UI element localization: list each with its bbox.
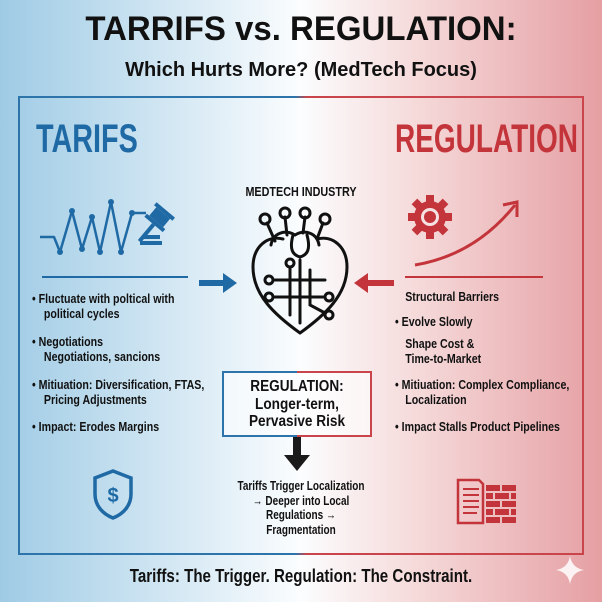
center caption: Fragmentation	[266, 522, 336, 536]
left bullets: • Impact: Erodes Margins	[32, 420, 159, 434]
icon: shield dollar	[93, 469, 133, 520]
icon: document and brick wall	[456, 478, 516, 524]
left bullets	[32, 292, 204, 434]
center caption: Tariffs Trigger Localization	[237, 479, 365, 493]
right bullets: Structural Barriers	[405, 290, 499, 304]
right bullets	[395, 290, 569, 434]
heading: tariffs: TARIFS	[36, 117, 138, 161]
center box: Pervasive Risk	[249, 413, 345, 430]
center box: Longer-term,	[255, 396, 339, 412]
icon: sparkle	[556, 556, 584, 584]
left bullets: Pricing Adjustments	[44, 393, 147, 407]
right bullets: Localization	[405, 393, 467, 407]
divider left	[42, 276, 188, 278]
footer: Tariffs: The Trigger. Regulation: The Constraint.	[130, 566, 472, 586]
icon: fluctuation chart with gavel	[40, 199, 175, 255]
left bullets: Negotiations, sancions	[44, 350, 160, 364]
arrow right	[199, 273, 237, 293]
right bullets: • Evolve Slowly	[395, 315, 473, 329]
center caption	[237, 479, 365, 536]
right bullets: • Impact Stalls Product Pipelines	[395, 420, 560, 434]
center caption: → Deeper into Local	[253, 494, 349, 508]
right bullets: Time-to-Market	[405, 352, 481, 366]
heading: regulation: REGULATION	[395, 117, 578, 161]
left bullets: • Negotiations	[32, 335, 103, 349]
left bullets: political cycles	[44, 307, 119, 321]
center box	[222, 371, 372, 437]
icon: gear and rising arrow	[408, 195, 518, 266]
subtitle: Which Hurts More? (MedTech Focus)	[125, 59, 477, 81]
arrow down	[284, 437, 310, 471]
center box: REGULATION:	[250, 378, 344, 395]
label: medtech industry: MEDTECH INDUSTRY	[245, 184, 357, 199]
center caption: Regulations →	[266, 508, 336, 522]
title: TARRIFS vs. REGULATION:	[85, 10, 517, 48]
icon: circuit heart	[252, 206, 348, 335]
left bullets: • Mitiuation: Diversification, FTAS,	[32, 378, 204, 392]
left bullets: • Fluctuate with poltical with	[32, 292, 174, 306]
arrow left	[354, 273, 394, 293]
icon: shield dollar: $	[107, 485, 119, 507]
frame	[18, 96, 584, 555]
right bullets: Shape Cost &	[405, 337, 474, 351]
right bullets: • Mitiuation: Complex Compliance,	[395, 378, 569, 392]
divider right	[405, 276, 543, 278]
